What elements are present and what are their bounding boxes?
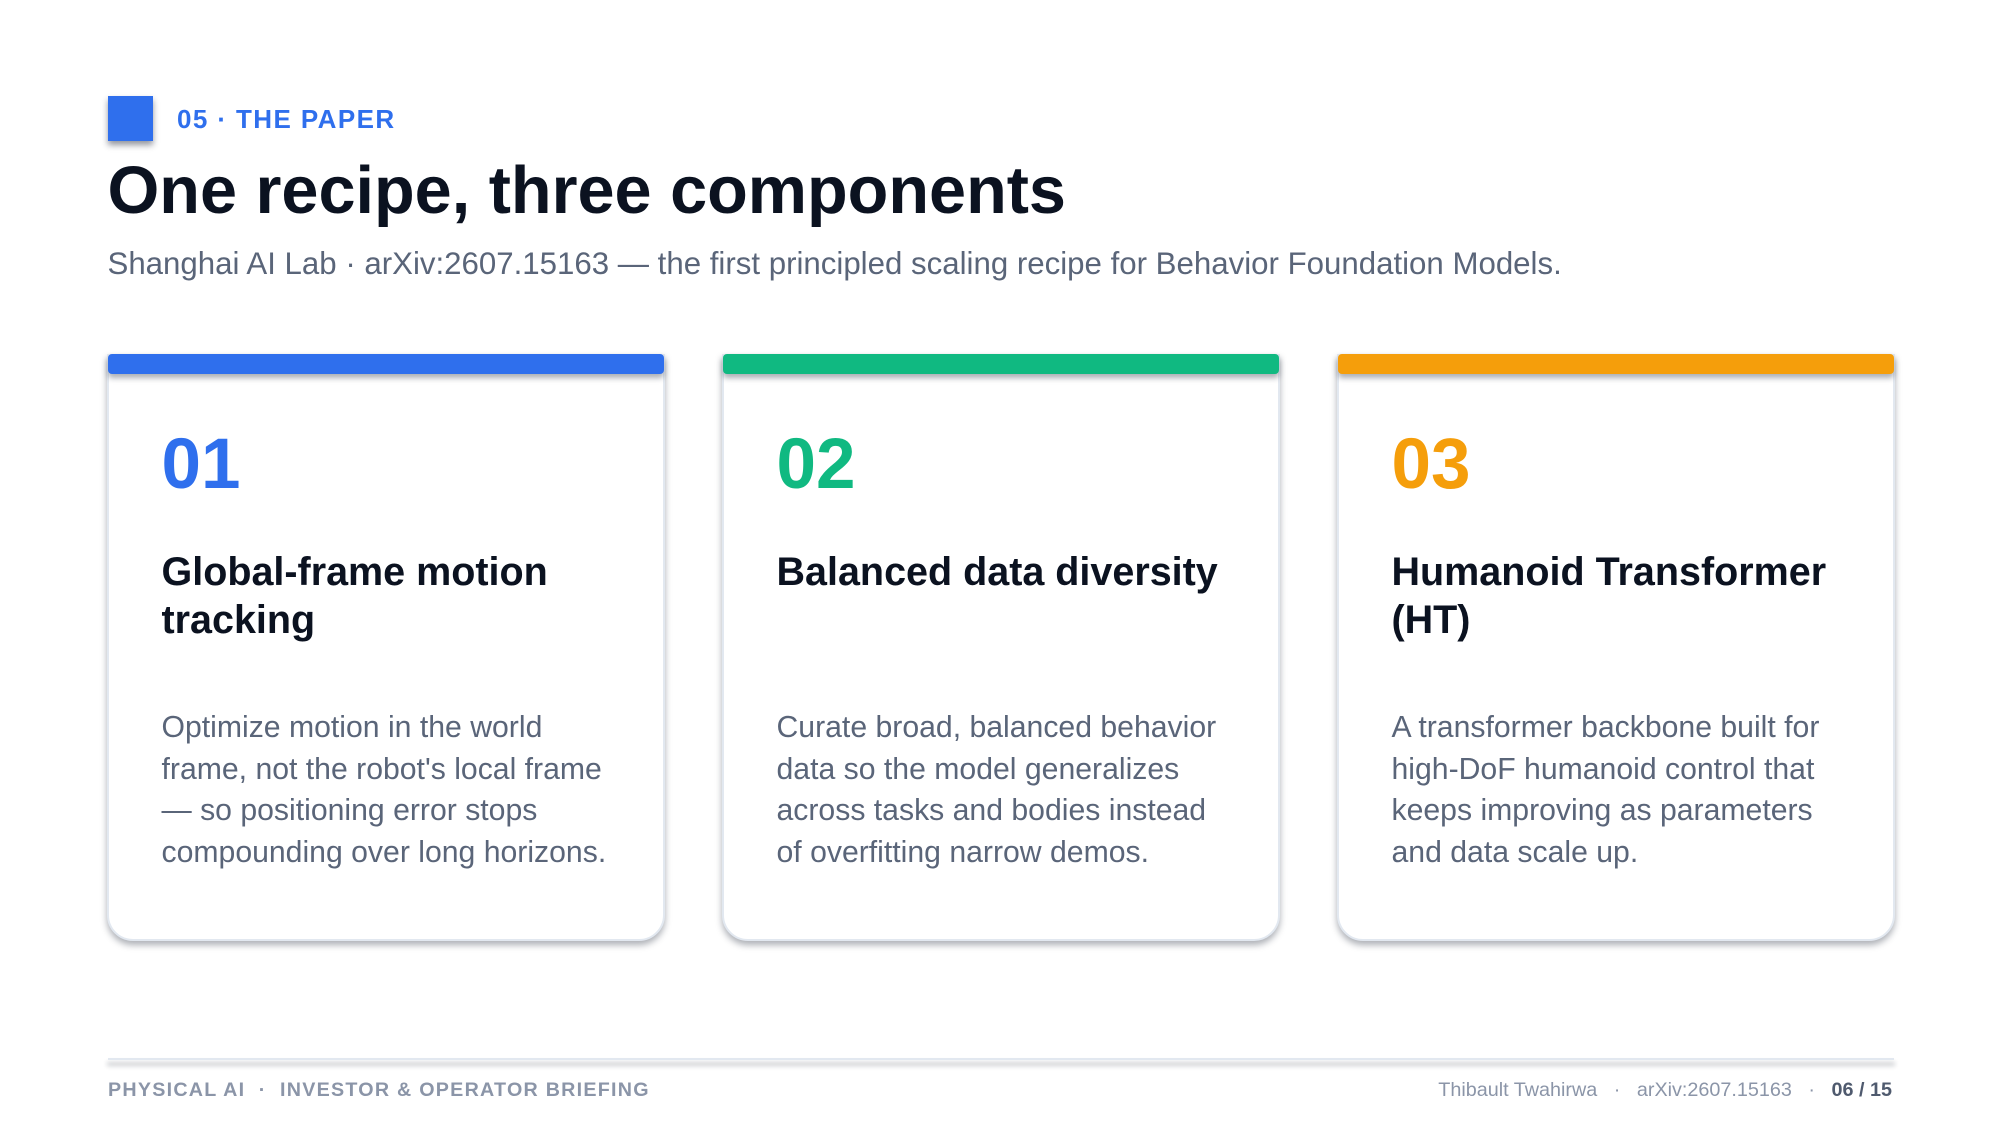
card 1 top bar bbox=[108, 354, 664, 374]
card 3 body bbox=[1392, 711, 1819, 869]
card 1 body bbox=[162, 711, 606, 869]
subtitle: Shanghai AI Lab · arXiv:2607.15163 — the first principled scaling recipe for Behavior Foundation Models. bbox=[108, 246, 1562, 281]
icon: section square bbox=[108, 96, 153, 141]
card 1 heading: Global-frame motion bbox=[162, 550, 548, 594]
card 3 body: keeps improving as parameters bbox=[1392, 794, 1813, 827]
card 1 body: compounding over long horizons. bbox=[162, 836, 606, 869]
card 3 heading: Humanoid Transformer bbox=[1392, 550, 1826, 594]
footer left text: PHYSICAL AI · INVESTOR & OPERATOR BRIEFING bbox=[108, 1079, 650, 1101]
card 1 heading bbox=[162, 550, 548, 642]
panel: card 2 bbox=[722, 354, 1280, 941]
eyebrow label: 05 · THE PAPER bbox=[177, 104, 396, 134]
card 3 heading: (HT) bbox=[1392, 598, 1470, 642]
number 02: 02 bbox=[776, 424, 855, 504]
footer rule bbox=[108, 1058, 1894, 1060]
card 2 top bar bbox=[723, 354, 1279, 374]
card 3 heading bbox=[1392, 550, 1826, 642]
title: One recipe, three components bbox=[108, 154, 1066, 228]
card 3 body: high-DoF humanoid control that bbox=[1392, 753, 1814, 786]
card 2 body: across tasks and bodies instead bbox=[776, 794, 1206, 827]
card 3 top bar bbox=[1338, 354, 1894, 374]
number 01: 01 bbox=[162, 424, 240, 504]
card 1 body: — so positioning error stops bbox=[162, 794, 537, 827]
card 2 body: Curate broad, balanced behavior bbox=[776, 711, 1216, 744]
panel: card 1 bbox=[107, 354, 665, 941]
card 1 heading: tracking bbox=[162, 598, 315, 642]
card 2 body: of overfitting narrow demos. bbox=[776, 836, 1149, 869]
card 2 heading: Balanced data diversity bbox=[776, 550, 1218, 594]
card 1 body: frame, not the robot's local frame bbox=[162, 753, 602, 786]
footer right text: Thibault Twahirwa · arXiv:2607.15163 · 06 / 15 bbox=[1438, 1079, 1892, 1101]
card 3 body: and data scale up. bbox=[1392, 836, 1638, 869]
card 2 body bbox=[776, 711, 1216, 869]
card 3 body: A transformer backbone built for bbox=[1392, 711, 1819, 744]
panel: card 3 bbox=[1337, 354, 1895, 941]
card 2 body: data so the model generalizes bbox=[776, 753, 1179, 786]
card 1 body: Optimize motion in the world bbox=[162, 711, 542, 744]
number 03: 03 bbox=[1392, 424, 1470, 504]
